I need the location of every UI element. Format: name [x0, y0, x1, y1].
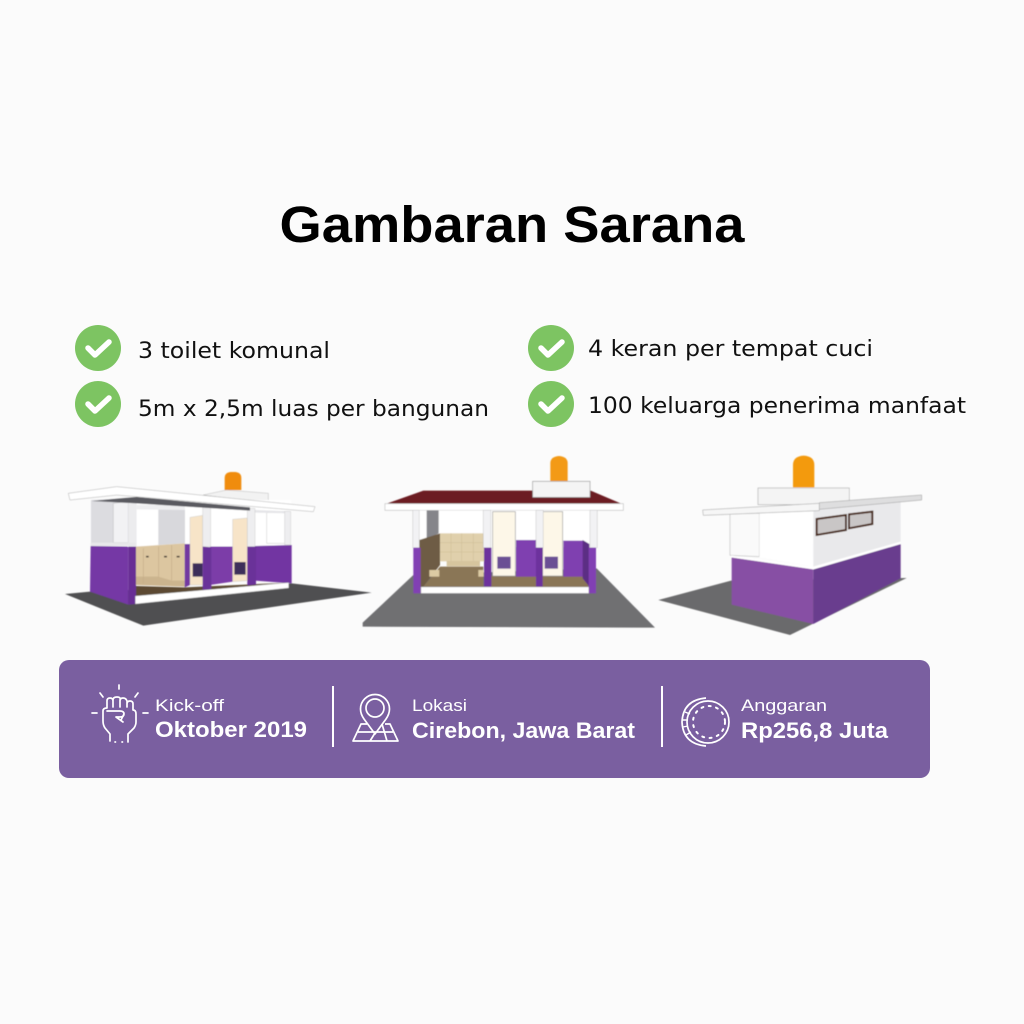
- tiled back wall: [136, 543, 185, 587]
- feature: 4 keran per tempat cuci: 4 keran per tempat cuci: [588, 336, 873, 362]
- icon: map pin: [353, 694, 398, 741]
- feature: 4 keran per tempat cuci: [528, 325, 873, 371]
- purple rear walls: [185, 544, 190, 587]
- columns: [128, 498, 137, 547]
- anggaran text: Anggaran: [741, 696, 827, 715]
- illustration: building front view: [363, 456, 655, 628]
- info panel: [59, 660, 930, 778]
- feature: 5m x 2,5m luas per bangunan: 5m x 2,5m luas per bangunan: [138, 396, 489, 422]
- feature: 3 toilet komunal: [75, 325, 330, 371]
- feature: 5m x 2,5m luas per bangunan: [75, 381, 489, 427]
- info panel: Oktober 2019: [155, 717, 307, 742]
- windows: [817, 515, 846, 535]
- red roof: [387, 491, 621, 503]
- info panel: Cirebon, Jawa Barat: [412, 718, 636, 743]
- floor edge: [421, 587, 589, 593]
- feature: 100 keluarga penerima manfaat: 100 keluarga penerima manfaat: [588, 393, 966, 419]
- upper wall: [413, 510, 595, 547]
- info panel: Rp256,8 Juta: [741, 718, 889, 743]
- water tank: [550, 456, 568, 481]
- purple lower walls: [732, 557, 813, 624]
- floor edge: [135, 583, 289, 604]
- roof underside: [92, 497, 250, 511]
- interior floor: [136, 583, 289, 596]
- water tank: [793, 456, 814, 487]
- roof: [68, 487, 315, 512]
- purple front: [90, 546, 128, 605]
- upper walls: [91, 500, 291, 546]
- lokasi text: Lokasi: [412, 696, 467, 715]
- feature: 100 keluarga penerima manfaat: [528, 381, 966, 427]
- icon: raised fist: [92, 685, 148, 742]
- doors: [493, 512, 515, 576]
- columns: [413, 510, 419, 548]
- roof slab: [703, 503, 819, 515]
- upper white wall: [730, 513, 759, 557]
- taps: [146, 554, 180, 559]
- purple walls: [516, 540, 537, 577]
- icon: coin: [682, 698, 729, 746]
- water tank: [225, 472, 241, 490]
- floor: [423, 567, 483, 587]
- feature: 3 toilet komunal: 3 toilet komunal: [138, 338, 330, 364]
- feature list: [75, 325, 966, 427]
- illustration: building left view: [65, 472, 372, 626]
- illustration: building rear view: [658, 456, 922, 635]
- kick-off text: Kick-off: [155, 696, 224, 715]
- tiled wall: [440, 533, 484, 561]
- doors: [190, 515, 203, 585]
- title: Gambaran Sarana: [280, 196, 745, 253]
